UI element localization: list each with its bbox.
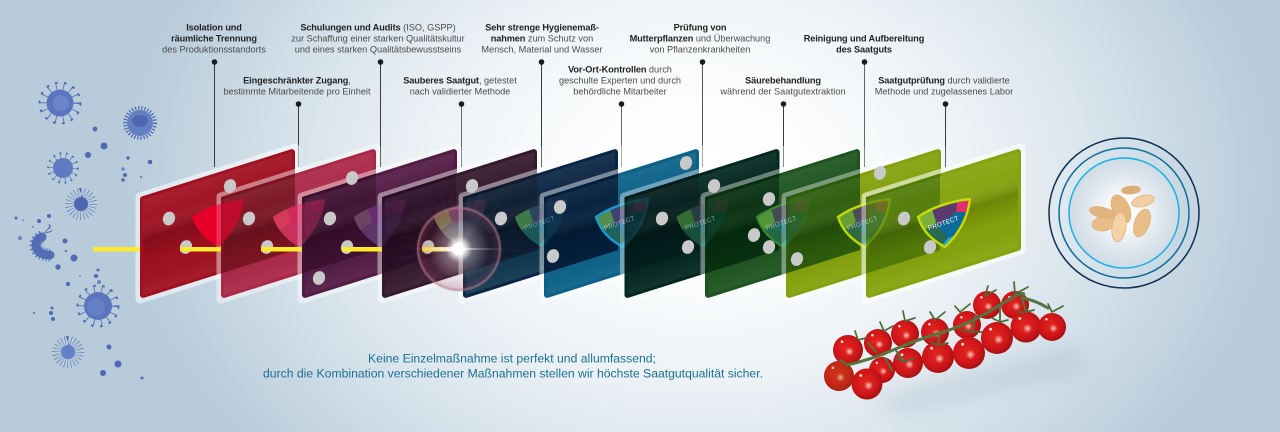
text: Vor-Ort-Kontrollen: Vor-Ort-Kontrollen durch [568, 64, 672, 74]
icon: PROTECT shield [914, 195, 974, 251]
text: Reinigung und Aufbereitung: des Saatguts [836, 44, 892, 54]
particles [14, 127, 152, 379]
panel 9: olive [753, 148, 941, 299]
text: Reinigung und Aufbereitung: Reinigung und Aufbereitung [804, 34, 924, 44]
PROTECT shield labels: PROTECT [523, 215, 556, 232]
grey panel holes [161, 154, 938, 287]
PROTECT shield labels: PROTECT [684, 215, 717, 232]
PROTECT shield labels: PROTECT [846, 215, 879, 232]
panel 6: petrol blue [511, 148, 699, 299]
bottom statement: Keine Einzelmaßnahme ist perfekt und allumfassend; [368, 352, 656, 366]
yellow beam [93, 247, 458, 252]
panel 1: red [140, 148, 295, 299]
bottom statement: durch die Kombination verschiedener Maßnahmen stellen wir höchste Saatgutqualität sicher. [263, 366, 763, 380]
panel 10: lime green [834, 148, 1021, 299]
panel 3: purple [269, 148, 457, 299]
panel 8: forest green [672, 148, 860, 299]
text: Sauberes Saatgut: , getestet [479, 76, 517, 86]
text: Schulungen und Audits: Schulungen und Audits [300, 22, 401, 32]
text: Hygienemaßnahmen: Mensch, Material und Wasser [481, 44, 603, 54]
text: Isolation: des Produktionsstandorts [162, 44, 266, 54]
text: Vor-Ort-Kontrollen: behördliche Mitarbeiter [573, 86, 667, 96]
bacterium [36, 224, 52, 255]
PROTECT shield labels: PROTECT [927, 215, 960, 232]
front tomatoes [824, 312, 1066, 400]
text: Isolation: räumliche Trennung [171, 34, 257, 44]
stem [840, 282, 1063, 370]
tomato vine [824, 282, 1090, 415]
back tomatoes [833, 291, 1029, 365]
panel 7: dark green [592, 148, 780, 299]
virus 6 [57, 341, 79, 363]
annotation connector lines [212, 59, 948, 167]
text: Säurebehandlung: während der Saatgutextraktion [719, 86, 846, 96]
seed circle [1049, 138, 1199, 288]
panel 2: crimson [192, 148, 376, 299]
text: Eingeschränkter Zugang: , [348, 76, 351, 86]
text: Isolation: Isolation und [186, 22, 242, 32]
virus 1 [40, 82, 80, 124]
text: Prüfung von Mutterpflanzen: von Pflanzenkrankheiten [650, 44, 750, 54]
PROTECT shield labels: PROTECT [765, 215, 798, 232]
text: Prüfung von Mutterpflanzen: Mutterpflanzen und Überwachung [630, 34, 770, 44]
text: Vor-Ort-Kontrollen: geschulte Experten und durch [559, 76, 681, 86]
text: Säurebehandlung: Säurebehandlung [745, 76, 821, 86]
text: Schulungen und Audits: (ISO, GSPP) [401, 22, 456, 32]
text: Saatgutprüfung: Methode und zugelassenes Labor [875, 86, 1013, 96]
text: Eingeschränkter Zugang: bestimmte Mitarbeitende pro Einheit [223, 86, 371, 96]
lens flare [409, 208, 509, 290]
text: Hygienemaßnahmen: nahmen zum Schutz von [491, 34, 593, 44]
text: Prüfung von Mutterpflanzen: Prüfung von [674, 22, 727, 32]
virus 3 [48, 153, 78, 183]
PROTECT shield labels: PROTECT [603, 215, 636, 232]
PROTECT shield labels [523, 215, 960, 232]
tomato shadow [870, 345, 1090, 415]
viruses and particles [14, 82, 155, 380]
icon: seeds [1088, 185, 1156, 243]
text: Schulungen und Audits: und eines starken Qualitätsbewusstseins [295, 44, 462, 54]
text: Eingeschränkter Zugang: Eingeschränkter Zugang [243, 76, 348, 86]
text: Sauberes Saatgut: nach validierter Methode [410, 86, 510, 96]
text: Sauberes Saatgut: Sauberes Saatgut [403, 76, 479, 86]
text: Saatgutprüfung: Saatgutprüfung durch validierte [878, 76, 1010, 86]
panel 4: aubergine [350, 148, 537, 299]
virus 5 [78, 286, 118, 326]
text: Hygienemaßnahmen: Sehr strenge Hygienemaß- [485, 22, 599, 32]
text: Schulungen und Audits: zur Schaffung einer starken Qualitätskultur [291, 34, 465, 44]
panel 5: navy [430, 148, 618, 299]
virus 2 [125, 108, 155, 138]
virus 4 [70, 193, 92, 215]
